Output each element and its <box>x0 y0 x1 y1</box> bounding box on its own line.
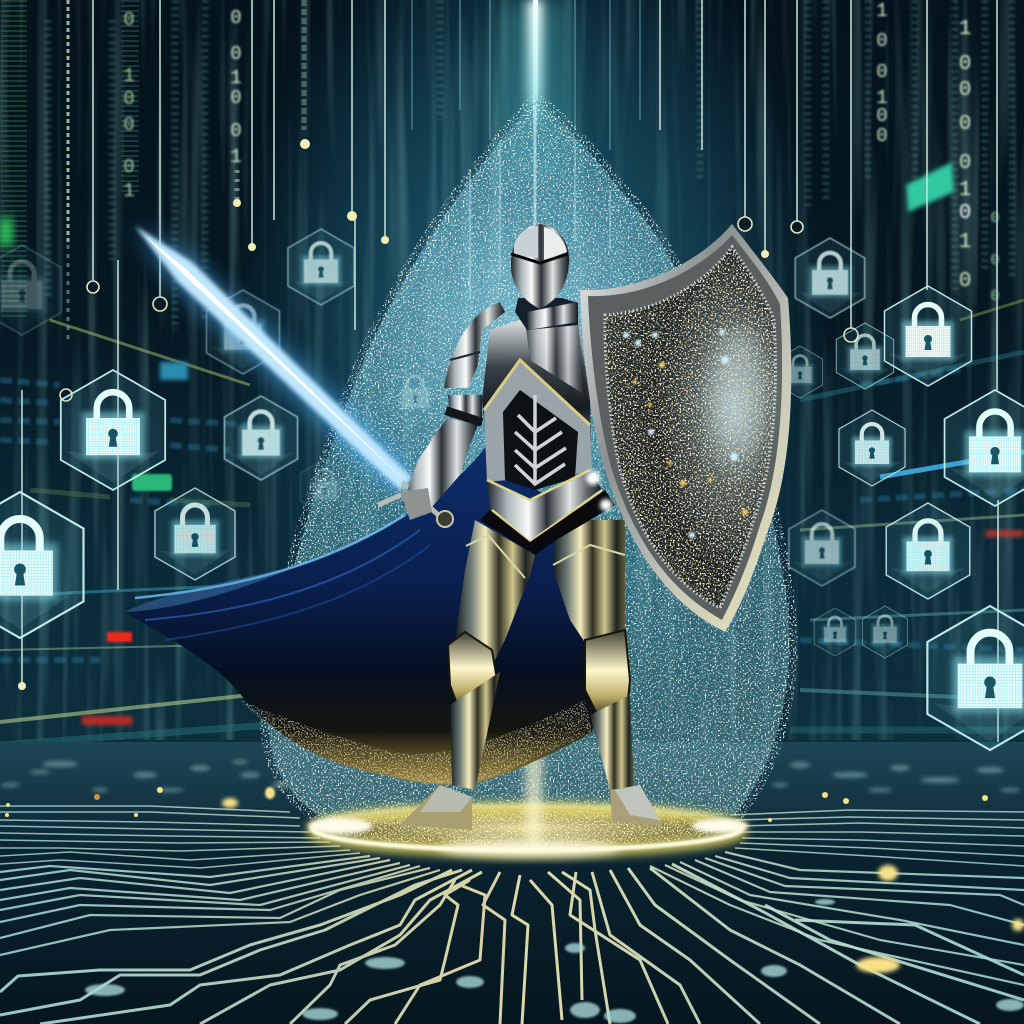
knight: left arm and gauntlet <box>400 395 483 520</box>
binary code columns: 1 <box>230 146 242 168</box>
flowing navy cape <box>125 425 610 785</box>
binary code columns: 0 <box>990 252 1000 269</box>
floor: golden glints <box>5 787 1024 973</box>
binary code columns: 0 <box>959 202 971 225</box>
digital rain columns <box>14 0 1012 340</box>
binary code columns: 1 <box>959 18 971 41</box>
shield: gold glints <box>633 362 748 515</box>
binary code columns: 1 <box>959 231 971 254</box>
particle force field dome <box>268 100 790 825</box>
binary code columns: 1 <box>959 179 971 202</box>
binary code columns: 0 <box>123 114 135 136</box>
knight: right leg <box>553 520 662 825</box>
binary code columns: 0 <box>959 113 971 136</box>
glowing sword <box>135 226 453 527</box>
binary code columns: 0 <box>230 7 242 29</box>
knight: gorget <box>515 298 578 330</box>
knight: torso armour <box>480 318 615 555</box>
binary code columns: 0 <box>230 43 242 65</box>
binary code columns: 0 <box>959 53 971 76</box>
binary code columns: 1 <box>876 87 888 109</box>
binary code columns: 0 <box>123 88 135 110</box>
binary code columns: 1 <box>876 0 888 22</box>
shield with digital surface <box>580 224 791 632</box>
binary code columns: 0 <box>123 156 135 178</box>
knight figure <box>400 224 662 830</box>
central light beam <box>500 0 570 180</box>
binary code columns: 0 <box>959 270 971 293</box>
binary code columns: 0 <box>230 120 242 142</box>
lock icons in hexagons, right group <box>777 238 1024 750</box>
binary code columns: 0 <box>876 125 888 147</box>
floor: circuit pads <box>85 899 1024 1023</box>
binary code columns: 1 <box>123 180 135 202</box>
hanging data lines with nodes <box>18 0 1001 785</box>
floor: distant bokeh lights <box>0 760 1020 792</box>
binary code columns: 0 <box>123 9 135 31</box>
lock icons in hexagons, left group <box>0 229 354 638</box>
coloured status blips <box>0 162 1024 725</box>
binary code columns: 0 <box>876 30 888 52</box>
shield: star glints <box>623 329 738 538</box>
binary code columns: 0 <box>876 61 888 83</box>
floor: circuit board <box>0 742 1024 1024</box>
binary code columns: 0 <box>230 87 242 109</box>
binary code columns: 0 <box>876 105 888 127</box>
binary code columns: 1 <box>123 65 135 87</box>
glowing golden ring on the floor <box>305 745 749 856</box>
binary code columns: 0 <box>959 152 971 175</box>
binary code columns: 0 <box>990 288 1000 305</box>
knight: left leg <box>400 520 535 830</box>
knight: helmet <box>511 224 569 309</box>
binary code columns: 0 <box>959 79 971 102</box>
binary code columns: 0 <box>990 210 1000 227</box>
binary code columns: 1 <box>230 67 242 89</box>
binary code columns <box>123 0 1000 305</box>
background data rows and perspective streams <box>0 300 1024 745</box>
knight: pauldron <box>444 302 505 388</box>
